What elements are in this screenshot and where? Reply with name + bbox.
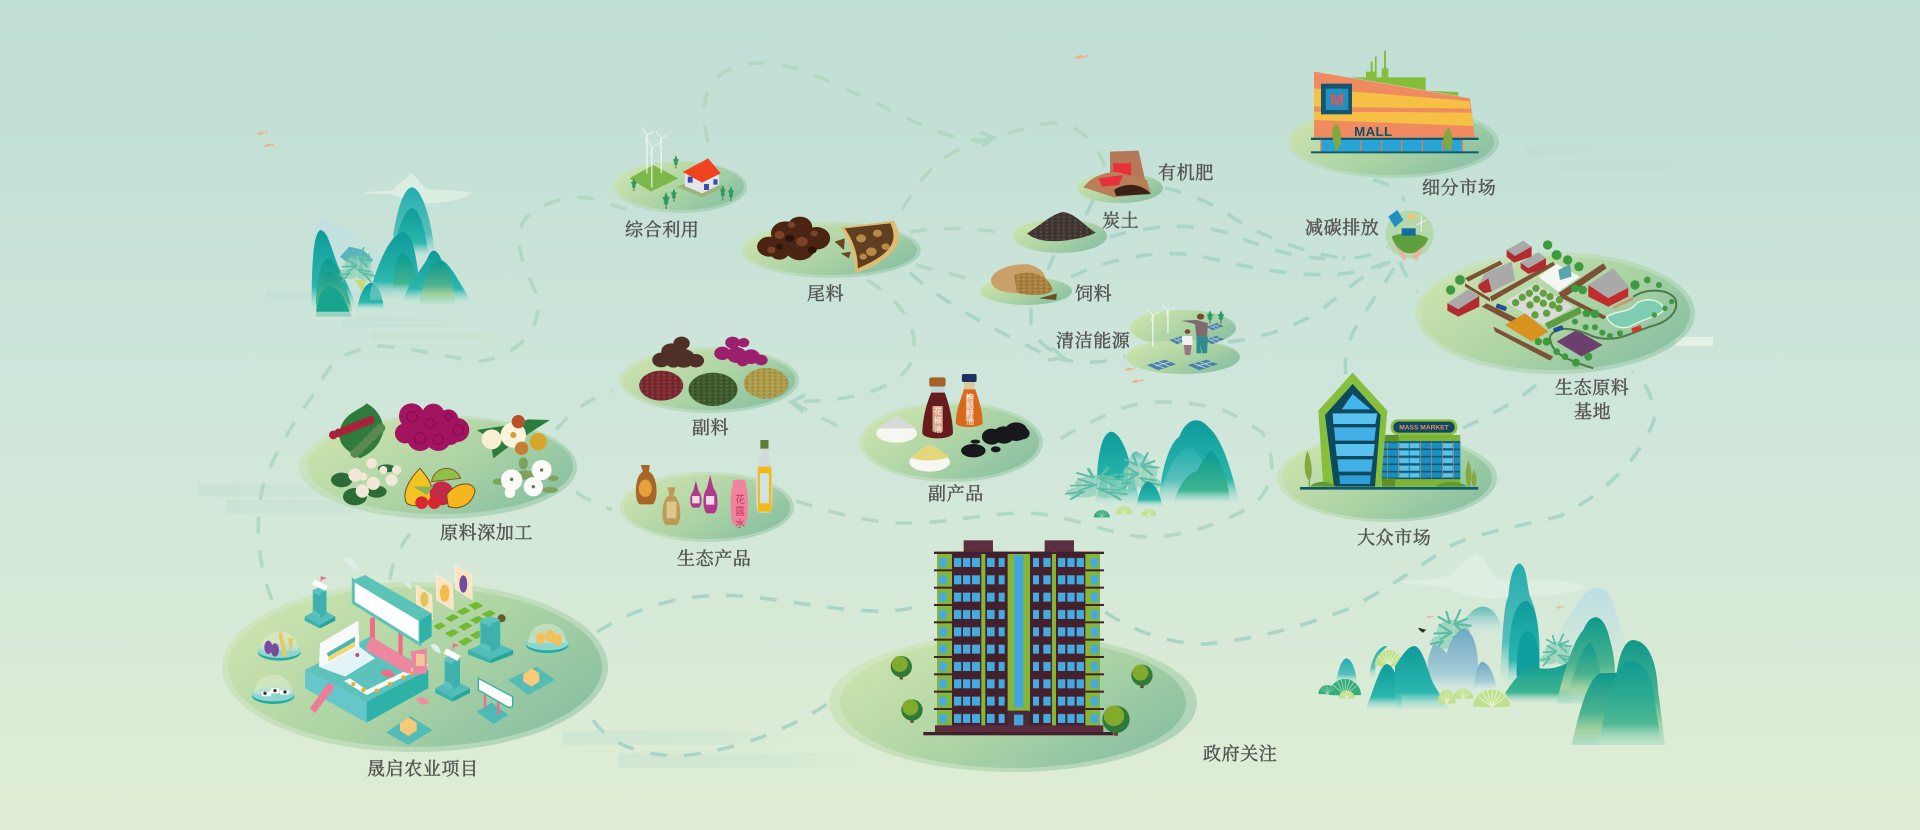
panel: 细分市场 <box>1287 51 1499 198</box>
panel: 尾料 <box>741 217 921 304</box>
platform <box>222 582 608 752</box>
dashed flow routes <box>258 63 1654 756</box>
label: 炭土 <box>1102 211 1139 231</box>
icon: char soil pile <box>1027 212 1096 241</box>
panel: 饲料 <box>980 264 1112 305</box>
bottle labels: 籽 <box>966 408 974 419</box>
platform <box>859 402 1043 482</box>
icon: mall building: MALL <box>1354 124 1392 139</box>
icon: peppercorns <box>333 403 383 458</box>
panel: 炭土 <box>1013 211 1139 253</box>
label: 原料深加工 <box>440 523 533 543</box>
cloud <box>1400 553 1587 599</box>
icon: green powder <box>689 373 737 406</box>
bottle labels: 椒 <box>934 415 942 426</box>
illustration: right mountains <box>1318 553 1665 745</box>
platform <box>1013 219 1107 253</box>
label: 清洁能源 <box>1056 331 1131 351</box>
icon: parent and child <box>1181 314 1208 355</box>
icon: field with boards <box>416 565 506 646</box>
icon: yellow powder bowl <box>909 445 950 472</box>
icon: glass domes <box>252 624 569 704</box>
platform <box>620 472 794 542</box>
icon: trees <box>891 656 1153 736</box>
bottle label text: 水 <box>735 515 745 530</box>
icon: dried brown pile <box>652 337 704 368</box>
label: 综合利用 <box>625 220 699 240</box>
platform <box>1277 434 1497 522</box>
bottle label text: 露 <box>735 503 745 518</box>
panel: 原料深加工 <box>299 403 577 543</box>
icon: orange bottle <box>956 374 983 427</box>
bottle labels: 杞 <box>966 400 974 411</box>
panel: 大众市场 <box>1277 373 1497 548</box>
pond and road <box>1550 291 1676 368</box>
icon: government tower <box>923 540 1113 735</box>
arrowheads on routes <box>791 132 1064 412</box>
orchard <box>1505 283 1573 325</box>
icon: black fungus <box>961 422 1030 457</box>
icon: dried residue pile <box>757 217 830 260</box>
icon: roses <box>395 403 469 451</box>
panel: 生态原料基地 <box>1415 240 1695 422</box>
icon: house <box>676 158 726 197</box>
bottle labels <box>934 392 974 435</box>
panel: 晟启农业项目 <box>222 557 608 779</box>
bottle label text: 花 <box>735 491 745 506</box>
icon: mid towers <box>435 616 513 702</box>
icon: mall building <box>1311 51 1479 153</box>
label: 有机肥 <box>1158 163 1214 183</box>
icon: serum droppers <box>690 475 718 513</box>
icon: sauce bottle <box>922 377 953 438</box>
icon: mall building: M <box>1330 91 1344 110</box>
label: 减碳排放 <box>1305 218 1379 238</box>
icon: feed sack <box>991 264 1057 300</box>
icon: pines <box>631 155 734 209</box>
label: 副产品 <box>928 484 984 504</box>
icon: shampoo bottles <box>636 465 680 525</box>
bottle labels: 油 <box>966 416 974 427</box>
platform <box>613 161 747 213</box>
panel: 有机肥 <box>1077 151 1214 203</box>
platform <box>741 222 921 278</box>
icon: mixed fruit <box>405 468 475 509</box>
panel: 减碳排放 <box>1305 210 1434 260</box>
sheds <box>1447 241 1546 317</box>
small flying leaves <box>257 54 1144 383</box>
illustration: left mountains <box>310 173 500 340</box>
icon: red powder <box>639 371 683 401</box>
car <box>1496 303 1642 333</box>
illustration: centre mountains <box>1066 420 1240 518</box>
barn <box>1478 262 1515 293</box>
label: 饲料 <box>1075 284 1112 304</box>
icon: white bouquet <box>331 458 401 505</box>
label: 尾料 <box>807 284 844 304</box>
platform <box>299 415 577 519</box>
icon: magnolia and pears <box>477 415 550 458</box>
label: 生态产品 <box>677 549 751 569</box>
platform <box>1287 106 1499 178</box>
icon: water drops <box>344 557 441 653</box>
icon: left tower <box>305 576 335 628</box>
icon: oil bottle <box>756 440 772 513</box>
icon: yellow powder <box>744 368 788 399</box>
icon: mass market building <box>1300 373 1478 490</box>
platforms <box>1126 310 1240 374</box>
platform <box>619 347 799 413</box>
panel: 政府关注 <box>829 540 1277 772</box>
panel: 清洁能源 <box>1056 305 1240 374</box>
bottle labels: 油 <box>934 424 942 435</box>
panel: 综合利用 <box>613 127 747 240</box>
grain and crop plots <box>1505 307 1603 357</box>
icon: white powder bowl <box>876 417 917 443</box>
bottle labels: 花 <box>934 406 942 417</box>
bottle labels: 枸 <box>966 392 974 403</box>
trees <box>1446 240 1674 367</box>
label: 副料 <box>692 418 729 438</box>
icon: main factory <box>305 575 432 723</box>
icon: mass market building: MASS MARKET <box>1399 425 1449 432</box>
icon: farm <box>1446 240 1676 368</box>
icon: pink bottle <box>731 480 748 525</box>
icon: earth in hands <box>1386 210 1434 260</box>
bottle label text <box>735 491 745 530</box>
paths and fences <box>1465 261 1607 361</box>
yard <box>1538 264 1580 292</box>
label: 晟启农业项目 <box>367 759 479 779</box>
label: 生态原料 <box>1555 378 1629 398</box>
platform <box>1077 173 1163 203</box>
label <box>1555 378 1629 422</box>
icon: small billboard <box>477 678 513 724</box>
platform <box>829 634 1197 772</box>
cloud <box>363 173 472 203</box>
decorative mist bands <box>198 146 1722 768</box>
icon: residue dish <box>835 221 899 273</box>
platform <box>980 277 1072 305</box>
icon: purple berries <box>714 337 768 366</box>
label: 大众市场 <box>1357 528 1431 548</box>
panel: 生态产品 <box>620 440 794 569</box>
icon: wind turbines field <box>629 127 678 192</box>
icon: turbines and solar panels <box>1147 305 1225 370</box>
label: 政府关注 <box>1203 744 1277 764</box>
icon: fertiliser bags <box>1083 151 1151 197</box>
panel: 副料 <box>619 337 799 438</box>
panel: 副产品 <box>859 374 1043 504</box>
icon: cubes <box>386 667 555 745</box>
icon: white blossoms <box>493 457 559 498</box>
label: 基地 <box>1574 402 1611 422</box>
bird <box>1418 628 1427 633</box>
farmhouse <box>1588 268 1633 309</box>
platform <box>1415 252 1695 374</box>
label: 细分市场 <box>1422 178 1496 198</box>
